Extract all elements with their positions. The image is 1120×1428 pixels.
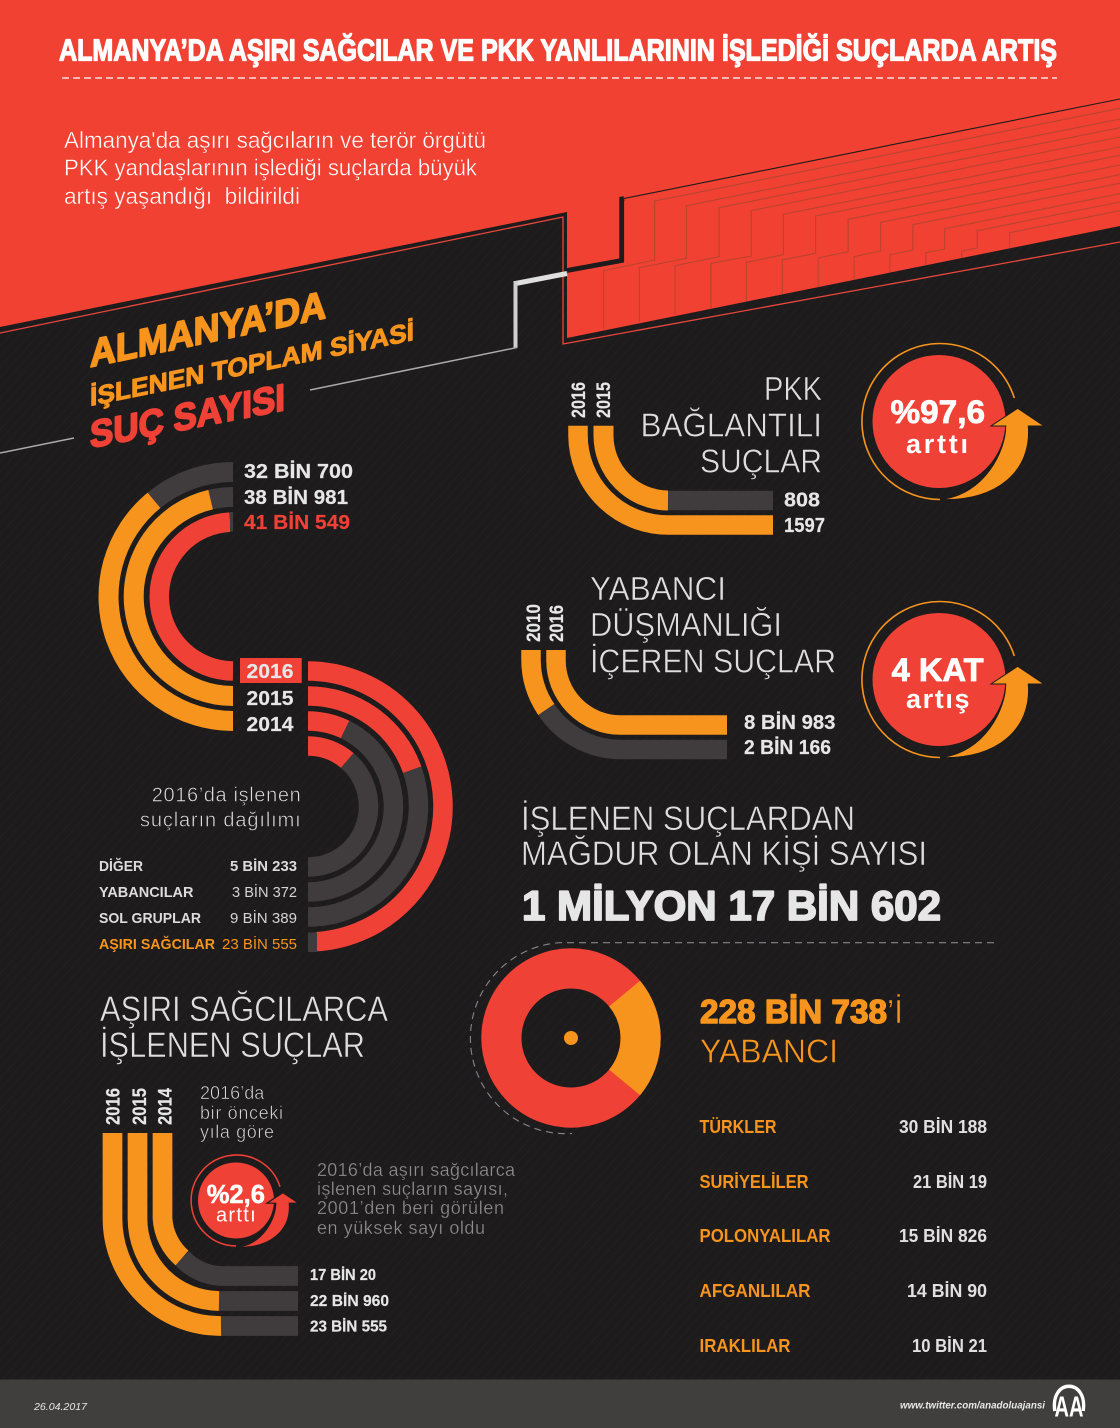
record high note: işlenen suçların sayısı, [317,1179,508,1199]
intro text [64,127,486,209]
badge: fourfold increase [862,602,1044,758]
nationality list: 10 BİN 21 [912,1336,987,1356]
nationality list: AFGANLILAR [700,1281,810,1301]
compared to previous year note: bir önceki [200,1103,283,1123]
badge: 2.6 percent increase: %2,6 [207,1179,265,1209]
distribution table: 3 BİN 372 [232,883,297,901]
S chart: year labels: 2014 [246,714,294,736]
nationality list: IRAKLILAR [700,1336,790,1356]
S chart: upper half, yearly totals [109,472,233,721]
xenophobia chart values: 2 BİN 166 [744,736,831,759]
heading: far-right crimes: İŞLENEN SUÇLAR [100,1026,365,1065]
xenophobia chart years [524,604,568,642]
PKK chart values: 1597 [784,515,825,537]
red header shape [0,0,1120,338]
heading: PKK related crimes: BAĞLANTILI [640,407,822,444]
far-right chart years: 2016 [103,1088,124,1125]
record high note: 2016’da aşırı sağcılarca [317,1160,516,1180]
record high note: en yüksek sayı oldu [317,1218,485,1238]
PKK chart years: 2015 [594,382,615,418]
nationality list: 15 BİN 826 [899,1226,987,1246]
far-right chart values [310,1266,389,1336]
stepped staircase lines [604,108,1120,328]
foreign victims figure: 228 BİN 738 [700,993,887,1030]
distribution table: 23 BİN 555 [222,935,297,953]
title dashed divider [62,77,1057,79]
far-right chart years: 2015 [130,1088,151,1125]
intro text: artış yaşandığı bildirildi [64,183,300,209]
heading: number of victims [521,800,927,873]
xenophobia chart years: 2016 [547,605,568,642]
S chart: year labels [240,658,302,736]
distribution table: 5 BİN 233 [230,858,297,875]
heading: far-right crimes: AŞIRI SAĞCILARCA [100,990,389,1029]
xenophobia chart values [744,711,836,759]
distribution caption: 2016’da işlenen [152,785,301,807]
badge: 2.6 percent increase: arttı [216,1205,256,1227]
nationality list [700,1117,987,1356]
heading: total political crimes: İŞLENEN TOPLAM SİYASİ [90,316,414,412]
S chart: year labels: 2015 [246,688,294,710]
distribution table: 9 BİN 389 [230,909,297,927]
nationality list: 14 BİN 90 [907,1281,987,1301]
heading: PKK related crimes [640,370,822,480]
far-right chart values: 22 BİN 960 [310,1292,389,1310]
icon: agency logo: AA [1054,1392,1084,1424]
heading: number of victims: MAĞDUR OLAN KİŞİ SAYISI [521,835,927,873]
nationality list: 21 BİN 19 [913,1172,987,1192]
badge: fourfold increase: artış [906,684,970,714]
compared to previous year note: 2016’da [200,1083,265,1103]
distribution table: DİĞER [99,857,143,875]
footer date: 26.04.2017 [33,1401,88,1413]
far-right chart values: 17 BİN 20 [310,1266,376,1284]
badge: 97.6 percent increase: %97,6 [890,394,985,430]
distribution table: AŞIRI SAĞCILAR [99,935,215,953]
black step line on header [567,198,624,270]
heading: xenophobic crimes [590,570,836,680]
heading: xenophobic crimes: İÇEREN SUÇLAR [590,643,836,680]
compared to previous year note: yıla göre [200,1122,274,1142]
distribution caption: suçların dağılımı [140,810,301,832]
far-right chart bands [112,1133,298,1326]
xenophobia chart years: 2010 [524,604,545,642]
xenophobia chart values: 8 BİN 983 [744,711,836,734]
heading: xenophobic crimes: DÜŞMANLIĞI [590,606,782,643]
intro text: PKK yandaşlarının işlediği suçlarda büyük [64,154,477,180]
record high note: 2001’den beri görülen [317,1198,504,1218]
badge: 97.6 percent increase: arttı [906,429,968,459]
white connector line [0,274,567,453]
footer twitter link text: www.twitter.com/anadoluajansi [900,1400,1046,1412]
badge: 97.6 percent increase [862,344,1044,500]
distribution table [99,857,297,953]
PKK chart values [784,490,825,537]
PKK chart values: 808 [784,490,820,512]
heading: total political crimes: SUÇ SAYISI [90,376,285,457]
heading: total political crimes: ALMANYA’DA [90,283,326,376]
xenophobia chart bands [531,650,727,750]
yearly total values: 32 BİN 700 [244,460,353,483]
distribution caption [140,785,301,832]
compared to previous year note [200,1083,283,1142]
record high note [317,1160,516,1238]
foreign victims figure [700,993,903,1070]
far-right chart values: 23 BİN 555 [310,1318,387,1336]
badge: fourfold increase: 4 KAT [892,652,984,688]
icon: agency logo [1054,1386,1084,1424]
PKK chart years: 2016 [569,382,590,418]
nationality list: TÜRKLER [700,1117,776,1137]
distribution table: SOL GRUPLAR [99,910,201,927]
S chart: year labels: 2016 [246,661,294,683]
yearly total values [244,460,353,534]
foreign victims figure: ’İ [887,993,903,1030]
nationality list: 30 BİN 188 [899,1117,987,1137]
PKK chart bands [578,426,773,525]
heading: far-right crimes [100,990,389,1065]
heading: number of victims: İŞLENEN SUÇLARDAN [521,800,855,838]
footer bar [0,1380,1120,1428]
heading: total political crimes [90,283,414,457]
thin red outline under header [0,217,1120,344]
yearly total values: 38 BİN 981 [244,486,348,509]
donut chart: foreign victims share [501,968,661,1108]
distribution table: YABANCILAR [99,884,194,901]
far-right chart years: 2014 [156,1088,177,1125]
badge: 2.6 percent increase [191,1155,299,1247]
victims big number: 1 MİLYON 17 BİN 602 [522,882,941,929]
heading: PKK related crimes: PKK [764,370,822,407]
intro text: Almanya'da aşırı sağcıların ve terör örgütü [64,127,486,153]
yearly total values: 41 BİN 549 [244,511,350,534]
black diagonal line on header [624,99,1120,198]
heading: PKK related crimes: SUÇLAR [700,443,822,480]
PKK chart years [569,382,615,418]
nationality list: SURİYELİLER [700,1172,808,1192]
foreign victims figure: YABANCI [700,1033,838,1070]
heading: xenophobic crimes: YABANCI [590,570,726,607]
nationality list: POLONYALILAR [700,1226,831,1246]
S chart: lower half, 2016 breakdown [308,671,443,952]
dashed divider around donut [470,943,994,1134]
far-right chart years [103,1088,177,1125]
